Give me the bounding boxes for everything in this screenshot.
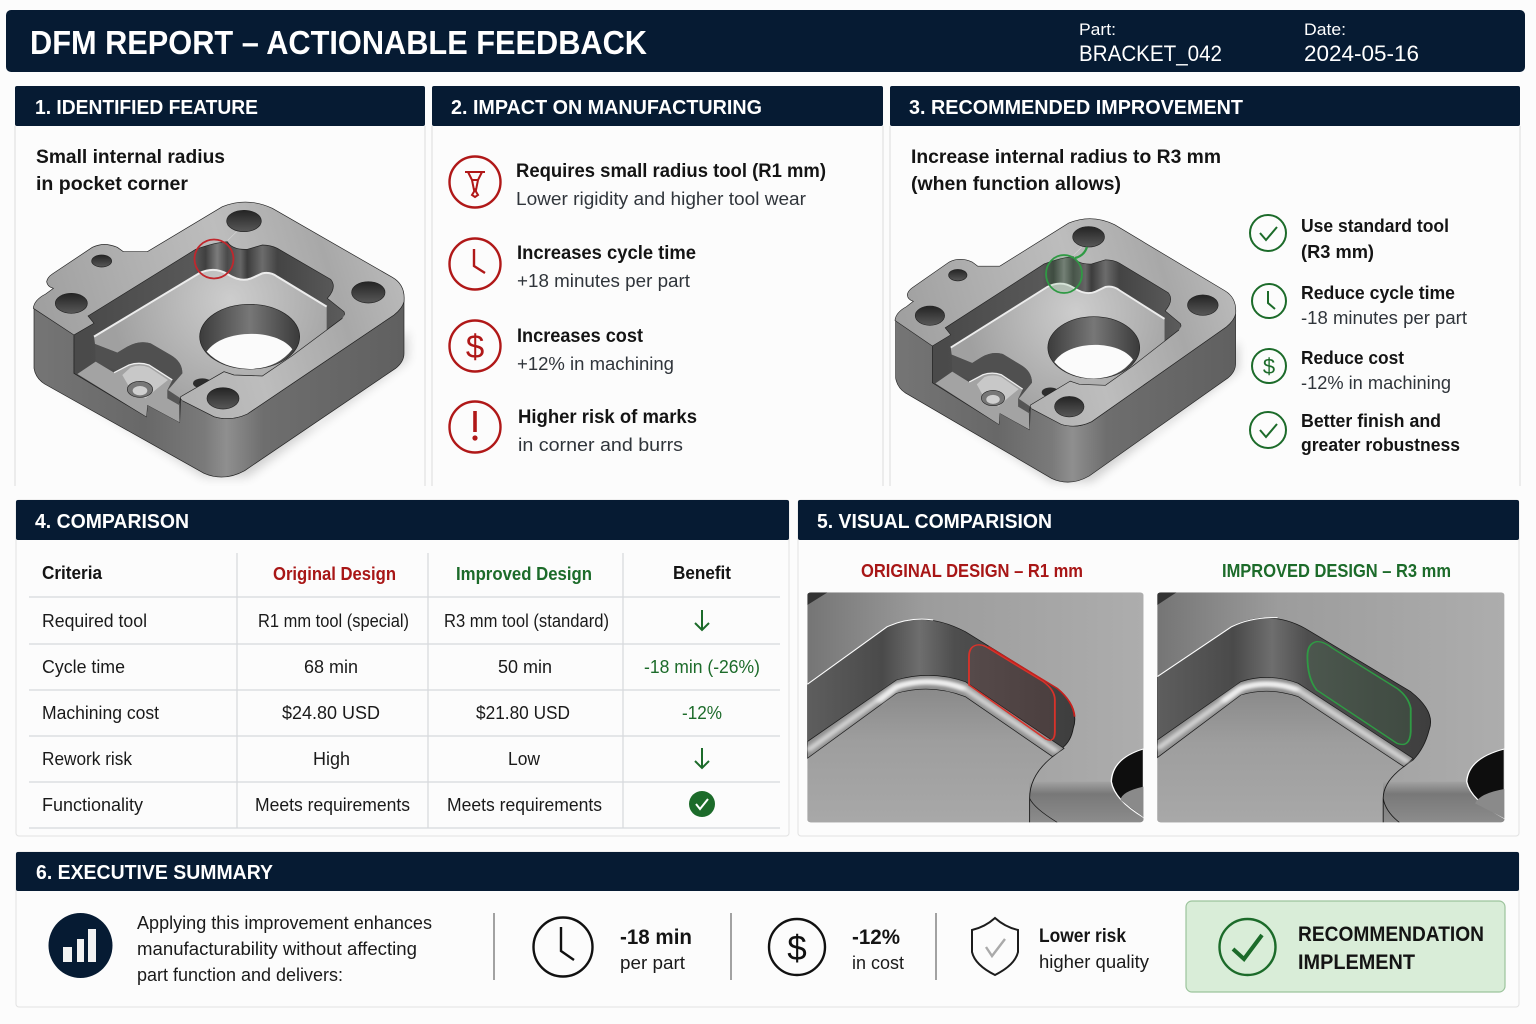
impact: tool: Requires small radius tool (R1 mm) (516, 161, 826, 182)
icon: check (1250, 412, 1286, 448)
part info: BRACKET_042 (1079, 41, 1222, 66)
row: cycle time (42, 657, 760, 677)
benefit: standard tool: Use standard tool (1301, 216, 1449, 236)
table header: Original Design (273, 564, 396, 584)
icon: dollar (769, 919, 825, 975)
metric: cost (852, 926, 904, 973)
metric: time: per part (620, 953, 685, 973)
summary text: manufacturability without affecting (137, 939, 417, 959)
row: functionality: Meets requirements (447, 795, 602, 815)
icon: dollar: $ (1263, 354, 1275, 379)
summary text: part function and delivers: (137, 965, 343, 985)
improvement description: (when function allows) (911, 174, 1121, 195)
metric: risk: higher quality (1039, 952, 1149, 972)
row: functionality: Functionality (42, 795, 143, 815)
benefit: finish (1301, 411, 1460, 455)
impact: cycle time: Increases cycle time (517, 243, 696, 264)
heading: identified feature: 1. IDENTIFIED FEATURE (35, 97, 258, 119)
icon: dollar (1252, 349, 1286, 383)
label: improved design: IMPROVED DESIGN – R3 mm (1222, 561, 1451, 581)
title: DFM REPORT – ACTIONABLE FEEDBACK (30, 24, 647, 61)
row: machining cost: -12% (682, 703, 722, 723)
impact: cost (517, 326, 674, 374)
bracket illustration with red highlight (33, 202, 407, 477)
benefit: cycle time: -18 minutes per part (1301, 308, 1467, 328)
improvement description (911, 147, 1221, 195)
photo: original corner (807, 592, 1143, 822)
icon: dollar (450, 320, 500, 372)
bracket illustration with green highlight (895, 219, 1239, 482)
icon: warning (450, 402, 500, 452)
icon: clock (534, 918, 592, 976)
improvement description: Increase internal radius to R3 mm (911, 147, 1221, 168)
part info (1079, 20, 1222, 66)
icon: clock (450, 238, 500, 290)
row: functionality: Meets requirements (255, 795, 410, 815)
table header: Criteria (42, 563, 103, 583)
heading: impact: 2. IMPACT ON MANUFACTURING (451, 97, 762, 119)
row: machining cost: Machining cost (42, 703, 159, 723)
row: required tool: R1 mm tool (special) (258, 611, 409, 631)
impact: cost: Increases cost (517, 326, 644, 347)
row: rework risk: Rework risk (42, 749, 133, 769)
icon: tool (450, 156, 500, 208)
row: cycle time: 68 min (304, 657, 358, 677)
part info: Part: (1079, 20, 1116, 39)
icon: check (1250, 215, 1286, 251)
benefit: cycle time (1301, 283, 1467, 328)
row: required tool (42, 610, 709, 631)
icon: green check (1220, 919, 1276, 975)
row: cycle time: Cycle time (42, 657, 125, 677)
panel: executive summary (16, 852, 1519, 1007)
metric: cost: in cost (852, 953, 904, 973)
label: original design: ORIGINAL DESIGN – R1 mm (861, 561, 1083, 581)
icon: clock (1252, 284, 1286, 318)
benefit: finish: greater robustness (1301, 435, 1460, 455)
summary text (137, 913, 432, 985)
date info (1304, 20, 1419, 66)
row: machining cost: $24.80 USD (282, 703, 380, 723)
benefit: finish: Better finish and (1301, 411, 1441, 431)
recommendation text: RECOMMENDATION (1298, 923, 1484, 946)
row: cycle time: 50 min (498, 657, 552, 677)
comparison table (29, 553, 780, 828)
metric: cost: -12% (852, 926, 900, 949)
metric: time: -18 min (620, 926, 692, 949)
benefit: cost: -12% in machining (1301, 373, 1451, 393)
row: cycle time: -18 min (-26%) (644, 657, 760, 677)
icon: dollar: $ (466, 328, 484, 365)
icon: dollar: $ (787, 929, 807, 968)
table header: Improved Design (456, 564, 592, 584)
row: functionality (42, 791, 715, 817)
row: rework risk (42, 748, 709, 769)
panel: impact on manufacturing (432, 86, 883, 486)
metric: time (620, 926, 692, 973)
benefit: cost: Reduce cost (1301, 348, 1404, 368)
row: rework risk: Low (508, 749, 541, 769)
panel: recommended improvement (890, 86, 1520, 486)
heading: comparison: 4. COMPARISON (35, 511, 189, 533)
row: machining cost (42, 703, 722, 723)
benefit: standard tool: (R3 mm) (1301, 242, 1374, 262)
feature description: in pocket corner (36, 174, 189, 195)
feature description (36, 147, 225, 195)
table header: Benefit (673, 563, 731, 583)
icon: shield (972, 918, 1018, 975)
recommendation text: IMPLEMENT (1298, 951, 1415, 974)
panel: identified feature (15, 86, 425, 486)
benefit: cycle time: Reduce cycle time (1301, 283, 1455, 303)
icon: bar chart (48, 913, 112, 978)
impact: risk: Higher risk of marks (518, 407, 697, 428)
heading: recommended improvement: 3. RECOMMENDED IMPROVEMENT (909, 97, 1243, 119)
heading: executive summary: 6. EXECUTIVE SUMMARY (36, 862, 274, 884)
panel: comparison (16, 500, 789, 836)
row: required tool: R3 mm tool (standard) (444, 611, 609, 631)
impact: tool: Lower rigidity and higher tool wear (516, 189, 806, 209)
impact: risk (518, 407, 697, 455)
benefit: standard tool (1301, 216, 1449, 262)
row: machining cost: $21.80 USD (476, 703, 570, 723)
feature description: Small internal radius (36, 147, 225, 168)
summary text: Applying this improvement enhances (137, 913, 432, 933)
impact: cost: +12% in machining (517, 354, 674, 374)
recommendation text (1298, 923, 1484, 974)
benefit: cost (1301, 348, 1451, 393)
table header (42, 563, 731, 584)
callout: recommendation (1186, 901, 1505, 992)
impact: tool (516, 161, 826, 209)
impact: cycle time: +18 minutes per part (517, 271, 690, 291)
heading: visual comparison: 5. VISUAL COMPARISION (817, 511, 1052, 533)
date info: Date: (1304, 20, 1346, 39)
header bar (6, 10, 1525, 72)
date info: 2024-05-16 (1304, 41, 1419, 66)
metric: risk (1039, 926, 1149, 972)
panel: visual comparison (798, 500, 1519, 836)
metric: risk: Lower risk (1039, 926, 1126, 947)
row: required tool: Required tool (42, 611, 147, 631)
impact: risk: in corner and burrs (518, 435, 683, 455)
row: rework risk: High (313, 749, 350, 769)
photo: improved corner (1157, 592, 1504, 822)
impact: cycle time (517, 243, 696, 291)
